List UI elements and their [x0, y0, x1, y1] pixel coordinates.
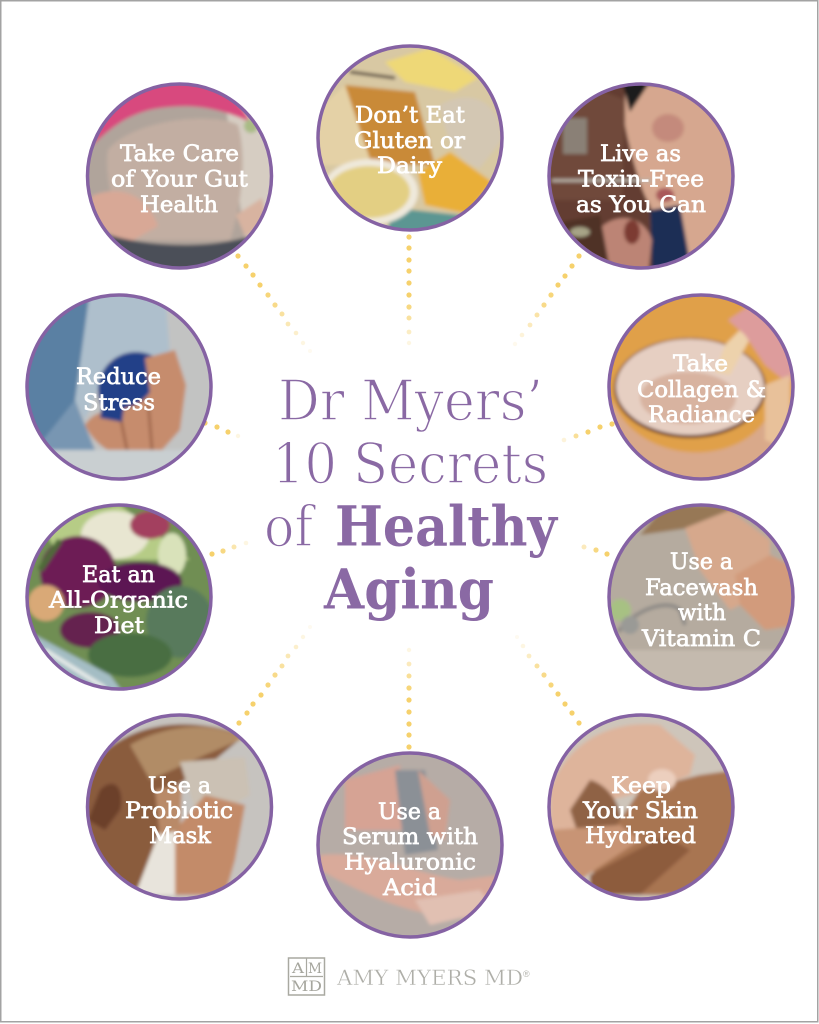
label: Live as [600, 141, 681, 167]
dotted connector: hydrated [515, 635, 582, 726]
label: Eat an [82, 562, 155, 588]
dotted connector: facewash [582, 544, 610, 557]
label: Serum with [342, 824, 478, 850]
ring [27, 295, 211, 479]
dotted connector: top [406, 234, 412, 345]
label: Mask [149, 823, 211, 849]
panel: serum [315, 750, 510, 945]
photo: mug with spoon [610, 296, 792, 478]
label: Radiance [648, 402, 755, 428]
label: Hyaluronic [344, 850, 476, 876]
dotted connector: collagen [562, 421, 615, 442]
label: Acid [382, 875, 437, 901]
label [111, 141, 248, 218]
ring [318, 753, 502, 937]
label: Reduce [76, 364, 161, 390]
label: Use a [670, 549, 733, 575]
panel: reduce stress [20, 290, 220, 486]
logo mark: MD [291, 979, 322, 995]
ring [318, 46, 502, 230]
label: Take [673, 351, 728, 377]
photo: cheese bowls [320, 48, 500, 228]
ring [609, 505, 793, 689]
photo: belly with hands [89, 86, 270, 266]
label: Toxin-Free [578, 166, 704, 192]
photo: woman with face mask [89, 716, 270, 898]
photo: hands with dropper [320, 754, 500, 936]
label [342, 799, 478, 901]
label: All-Organic [48, 588, 188, 614]
label: Don’t Eat [355, 102, 465, 128]
panel: gluten and dairy [315, 40, 505, 235]
label: Probiotic [125, 798, 233, 824]
panel: collagen [605, 290, 800, 485]
label [76, 364, 161, 416]
panel: facewash [605, 500, 800, 695]
title: of [264, 495, 317, 560]
label: Facewash [645, 575, 758, 601]
logo: Amy Myers MD [288, 958, 530, 995]
dotted connector: gut [235, 253, 312, 353]
dotted connector: stress [202, 420, 240, 438]
photo: hands applying cream [550, 716, 732, 898]
ring [88, 715, 272, 899]
label: with [678, 600, 726, 626]
panel: toxin free [545, 80, 740, 275]
label [576, 141, 706, 218]
dotted connector: toxin [513, 253, 582, 346]
dotted connector: mask [236, 625, 312, 726]
dotted connector: diet [209, 541, 248, 557]
photo: hand squeezing ball [28, 296, 210, 478]
label [48, 562, 188, 639]
label [125, 773, 233, 849]
label: Vitamin C [641, 626, 761, 652]
logo wordmark: AMY MYERS MD [336, 966, 523, 990]
label: Collagen & [637, 377, 766, 403]
label: Stress [83, 390, 155, 416]
label: Health [140, 192, 218, 218]
title: Aging [323, 556, 494, 622]
title [264, 369, 559, 622]
panel: gut health [86, 82, 274, 270]
photo: washing face at tap [610, 506, 792, 688]
label: Gluten or [354, 128, 465, 154]
label: Take Care [120, 141, 239, 167]
registered mark: ® [523, 969, 530, 979]
label: of Your Gut [111, 166, 248, 192]
logo mark: A [291, 961, 305, 977]
label: Keep [611, 773, 671, 799]
label: Diet [94, 613, 144, 639]
label [354, 102, 465, 179]
logo mark [288, 958, 324, 995]
title: 10 Secrets [272, 432, 548, 497]
ring [88, 84, 272, 268]
title: Healthy [335, 494, 559, 558]
panel: hydrated skin [545, 710, 740, 905]
dotted connector: serum [406, 648, 412, 750]
ring [27, 505, 211, 689]
label [641, 549, 761, 652]
panel: probiotic mask [80, 710, 280, 905]
label: Hydrated [585, 823, 696, 849]
ring [609, 295, 793, 479]
panel: organic diet [20, 500, 220, 695]
label: Use a [148, 773, 211, 799]
label: Dairy [377, 153, 442, 179]
logo mark: M [308, 961, 322, 977]
ring [549, 84, 733, 268]
label [582, 773, 698, 849]
photo: face and tweezers [550, 86, 732, 266]
label: Your Skin [582, 798, 698, 824]
photo: vegetables [28, 506, 210, 688]
label [637, 351, 766, 428]
label: as You Can [576, 192, 706, 218]
label: Use a [378, 799, 441, 825]
title: Dr Myers’ [278, 369, 543, 434]
ring [549, 715, 733, 899]
